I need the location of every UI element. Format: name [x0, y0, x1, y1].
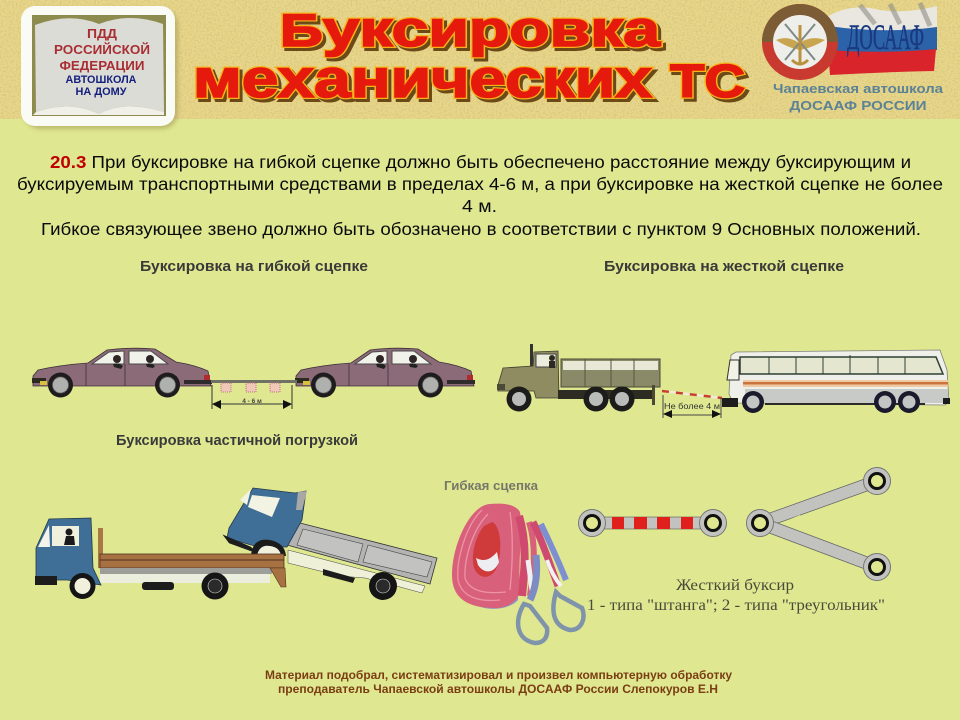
loaded dump truck: [227, 488, 437, 600]
icon: rigid tow bar type 1: [578, 510, 726, 536]
footer credits: [265, 668, 732, 696]
title: [193, 1, 748, 112]
dimension not more than 4 m: Не более 4 м: [664, 401, 720, 411]
title: Буксировка: [280, 1, 662, 57]
footer credits: Материал подобрал, систематизировал и произвел компьютерную обработку: [265, 668, 732, 682]
illustration: cars on flexible coupling: [32, 348, 475, 409]
illustration: partial loading tow: [35, 488, 437, 600]
book text: АВТОШКОЛА: [66, 74, 137, 86]
title: Буксировка: [283, 4, 665, 60]
caption: rigid tow bar: 1 - типа "штанга"; 2 - типа "треугольник": [587, 597, 885, 614]
school name: Чапаевская автошкола: [773, 81, 944, 96]
title: механических ТС: [193, 49, 745, 109]
school name: ДОСААФ РОССИИ: [790, 98, 926, 113]
school name: [773, 81, 944, 113]
caption: rigid tow bar: [587, 577, 885, 614]
striped rigid bar: [662, 391, 722, 398]
rule text 20.3: Гибкое связующее звено должно быть обозначено в соответствии с пунктом 9 Основных положений.: [41, 219, 921, 239]
dimension not more than 4 m: [663, 395, 721, 418]
book text: ПДД: [87, 26, 118, 41]
heading: rigid coupling: Буксировка на жесткой сцепке: [604, 258, 844, 275]
hooks: [518, 592, 584, 643]
rule text 20.3: [17, 152, 943, 239]
heading: partial loading: Буксировка частичной погрузкой: [116, 432, 358, 449]
dimension 4-6 m: 4 - 6 м: [242, 398, 262, 405]
dimension 4-6 m: [212, 385, 292, 409]
logo: PDD book badge: [21, 6, 178, 129]
label: flexible coupling strap: Гибкая сцепка: [444, 479, 539, 493]
coach bus: [722, 350, 950, 413]
caption: rigid tow bar: Жесткий буксир: [676, 577, 794, 594]
icon: rigid tow bar type 2: [746, 468, 890, 580]
book text: НА ДОМУ: [76, 86, 127, 98]
towing flatbed truck: [35, 518, 286, 600]
towing car: [295, 348, 475, 398]
book text: [54, 26, 150, 98]
header band: [0, 0, 960, 119]
illustration: tow strap with hooks: [452, 504, 584, 643]
title: механических ТС: [196, 52, 748, 112]
footer credits: преподаватель Чапаевской автошколы ДОСААФ России Слепокуров Е.Н: [278, 682, 718, 696]
towed car: [32, 348, 212, 398]
illustration: truck towing bus on rigid coupling: [497, 344, 950, 418]
heading: flexible coupling: Буксировка на гибкой сцепке: [140, 258, 368, 275]
title: Буксировка: [280, 1, 662, 57]
logo: DOSAAF emblem and flag: [762, 3, 937, 80]
rule text 20.3: 20.3 При буксировке на гибкой сцепке должно быть обеспечено расстояние между буксирующим и: [50, 152, 911, 172]
flexible link with flags: [211, 380, 297, 392]
army truck: [497, 344, 660, 412]
title: механических ТС: [193, 49, 745, 109]
rule text 20.3: буксируемым транспортными средствами в пределах 4-6 м, а при буксировке на жесткой сцепке не более: [17, 174, 943, 194]
book text: ФЕДЕРАЦИИ: [60, 58, 144, 73]
rule text 20.3: 4 м.: [462, 196, 497, 216]
book text: РОССИЙСКОЙ: [54, 42, 150, 57]
